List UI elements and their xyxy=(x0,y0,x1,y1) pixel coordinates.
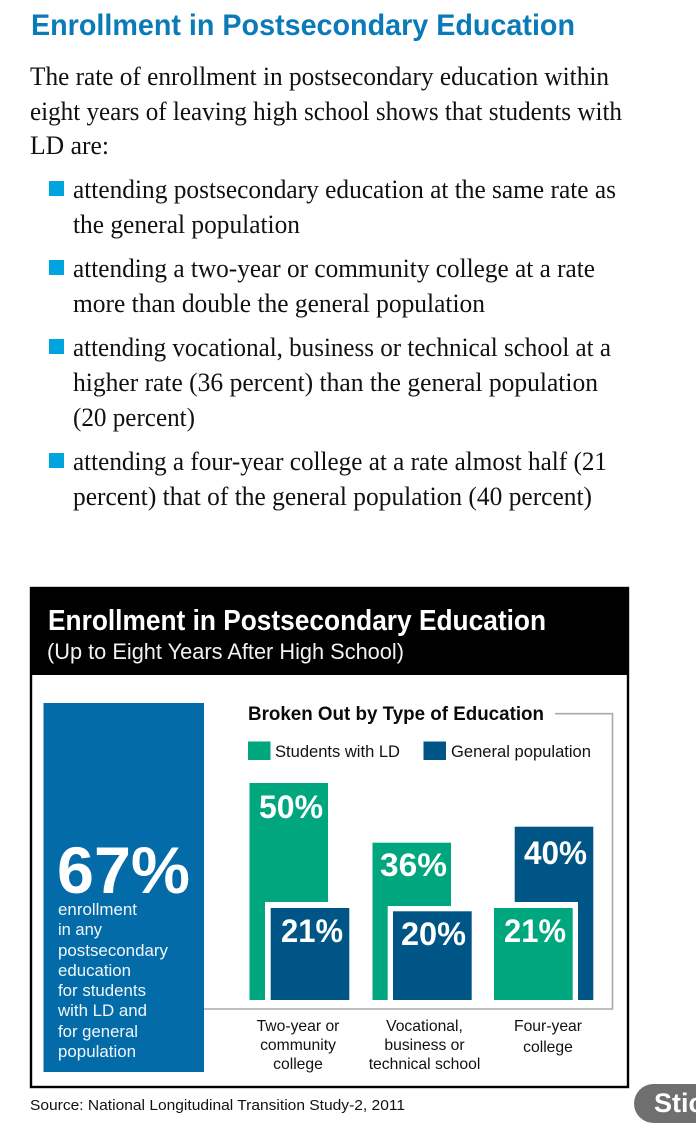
category label: four-year: Four-year xyxy=(514,1018,582,1035)
bullet 2: more than double the general population xyxy=(73,289,485,318)
bars: four-year college xyxy=(494,827,593,1000)
bullet 3: (20 percent) xyxy=(73,403,195,432)
bullet 1 xyxy=(49,175,616,239)
category label: vocational: Vocational, xyxy=(386,1018,463,1035)
bullet list xyxy=(49,175,616,511)
connector line xyxy=(203,714,612,1009)
category label: four-year: college xyxy=(523,1039,573,1056)
bullet 1: attending postsecondary education at the same rate as xyxy=(73,175,616,204)
summary panel: 67 percent: education xyxy=(58,961,131,980)
chart header band: Enrollment in Postsecondary Education xyxy=(48,605,546,637)
category label: two-year: college xyxy=(273,1056,323,1073)
bullet 4 xyxy=(49,447,607,511)
summary panel: 67 percent: with LD and xyxy=(57,1001,147,1020)
category label: two-year: Two-year or xyxy=(257,1018,339,1035)
summary panel: 67 percent: enrollment xyxy=(58,900,137,919)
breakdown heading: Broken Out by Type of Education xyxy=(248,704,544,725)
bullet 2: attending a two-year or community college at a rate xyxy=(73,254,595,283)
chart header band: (Up to Eight Years After High School) xyxy=(47,639,404,664)
bullet 2 xyxy=(49,254,595,318)
bullet 3: attending vocational, business or technical school at a xyxy=(73,333,611,362)
intro paragraph: LD are: xyxy=(30,131,109,160)
intro paragraph xyxy=(30,62,622,160)
bullet 4: attending a four-year college at a rate almost half (21 xyxy=(73,447,607,476)
category label: vocational: technical school xyxy=(369,1056,480,1073)
summary panel: 67 percent: in any xyxy=(58,920,102,939)
bars: four-year college: 40% xyxy=(524,835,587,871)
bars: two-year or community college: 50% xyxy=(259,789,323,825)
bars: vocational, business or technical school xyxy=(372,843,472,1000)
chart panel xyxy=(30,588,629,1087)
bullet 4: percent) that of the general population (40 percent) xyxy=(73,482,592,511)
bars: vocational, business or technical school: 36% xyxy=(380,847,447,883)
bars: two-year or community college xyxy=(250,783,349,1000)
intro paragraph: eight years of leaving high school shows that students with xyxy=(30,97,622,126)
summary panel: 67 percent: for general xyxy=(58,1022,138,1041)
page title: Enrollment in Postsecondary Education xyxy=(31,9,575,42)
intro paragraph: The rate of enrollment in postsecondary education within xyxy=(30,62,609,91)
sticky note button xyxy=(634,1084,696,1123)
bullet 3 xyxy=(49,333,611,432)
summary panel: 67 percent: 67% xyxy=(57,833,190,907)
summary panel: 67 percent xyxy=(44,703,204,1072)
category label: two-year xyxy=(257,1018,339,1073)
chart header band xyxy=(30,588,629,675)
bullet 3: higher rate (36 percent) than the general population xyxy=(73,368,598,397)
category label: vocational: business or xyxy=(384,1037,465,1054)
category label: four-year xyxy=(514,1018,582,1056)
category label: vocational xyxy=(369,1018,480,1073)
legend: Students with LD xyxy=(275,742,400,761)
bars: two-year or community college: 21% xyxy=(281,913,343,949)
source note: Source: National Longitudinal Transition Study-2, 2011 xyxy=(30,1098,405,1114)
bullet 1: the general population xyxy=(73,210,300,239)
bars: vocational, business or technical school: 20% xyxy=(401,916,466,952)
legend: General population xyxy=(451,742,591,761)
summary panel: 67 percent: postsecondary xyxy=(58,941,168,960)
summary panel: 67 percent: population xyxy=(58,1042,136,1061)
category label: two-year: community xyxy=(260,1037,336,1054)
legend xyxy=(248,742,591,761)
summary panel: 67 percent: for students xyxy=(58,981,146,1000)
bars: four-year college: 21% xyxy=(504,913,566,949)
